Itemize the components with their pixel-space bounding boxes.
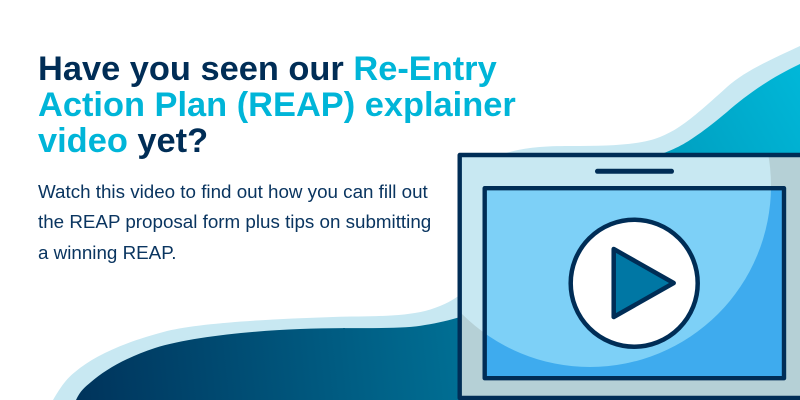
screen [485, 188, 784, 378]
wave: top right light [500, 46, 800, 160]
body text: Watch this video to find out how you can fill out [38, 181, 428, 202]
wave: bottom dark gradient [76, 317, 460, 400]
title: video yet? [38, 122, 208, 160]
title: Have you seen our Re-Entry [38, 50, 497, 88]
monitor light circle [462, 157, 771, 332]
title [38, 50, 516, 160]
screen frame [485, 188, 784, 378]
monitor frame [460, 155, 800, 398]
play triangle [614, 249, 674, 317]
monitor speaker bar [598, 169, 672, 174]
monitor body [460, 155, 800, 398]
body text: the REAP proposal form plus tips on submitting [38, 211, 431, 232]
play button circle [571, 220, 698, 347]
screen light circle [486, 190, 771, 367]
wave: top right teal [650, 64, 800, 160]
body text: a winning REAP. [38, 242, 177, 263]
monitor [458, 152, 800, 400]
wave: bottom light [53, 295, 460, 400]
body text [38, 181, 431, 263]
title: Action Plan (REAP) explainer [38, 86, 516, 124]
